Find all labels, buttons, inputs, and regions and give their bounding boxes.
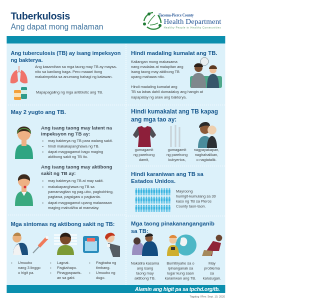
text: cases: County taon-taon. (176, 204, 206, 208)
text: latent: Ang isang taong may latent na (41, 126, 112, 132)
heading: stages: May 2 yugto ang TB. (11, 110, 66, 116)
text: active: pagtawa, pagsigaw o pagkanta. (48, 195, 101, 199)
heading: at risk: Mga taong pinakananganganib (131, 222, 215, 228)
icon: grid of people (135, 188, 171, 212)
panel: not common in US (131, 172, 216, 212)
icon: scale (83, 236, 99, 253)
heading: symptoms: Mga sintomas ng aktibong sakit ng TB: (11, 222, 115, 228)
captions: travel: Bumibiyahe sa o (167, 262, 194, 266)
captions: utensils: kubyertos, (168, 158, 186, 162)
logo: health department: Healthy People in Healthy Communities (164, 26, 221, 30)
captions: couple: naghahalikan, (195, 153, 218, 157)
text: symptom list 2 (50, 261, 82, 280)
icon: medicine (14, 87, 27, 100)
text: symptom list 3: Umuubo ng (96, 271, 115, 275)
text: active: may bakterya ng TB at may sakit. (48, 179, 104, 183)
text: outdoors: TB sa labas dahil dumadaloy ang hangin at (131, 90, 204, 94)
text: symptom list 3: Pagbaba ng (96, 261, 116, 265)
text: lungs: nito sa kanilang baga. Pero maaari itong (35, 70, 102, 74)
heading: does not spread: Hindi kumakalat ang TB kapag (131, 110, 218, 116)
text: lungs: makaimpekta sa anumang bahagi ng katawan. (35, 75, 113, 79)
heading: what is TB: Ang tuberculosis (TB) ay isang impeksyon (11, 51, 121, 57)
text: symptom list 1: nang 3 linggo (18, 266, 41, 270)
text: cases: Mayroong (176, 190, 193, 194)
icon: person active (15, 174, 33, 206)
text: latent: may bakterya ng TB para walang sakit. (48, 139, 113, 143)
icon: person with health problem (202, 235, 222, 256)
icon: two people talking (190, 58, 222, 88)
heading: what is TB: ng bakterya. (11, 58, 43, 64)
text: symptom list 2: Lagnat. (57, 261, 70, 265)
text: symptom list 1 (11, 261, 41, 275)
bottom teal bar (7, 285, 225, 293)
icon: utensils (171, 125, 180, 147)
text: close contact: nang madalas at malapitan ang (131, 65, 183, 69)
panel: 2 stages (11, 110, 113, 210)
icon: shirt (133, 126, 156, 147)
text: antibiotics: Mapapagaling ng mga antibiotic ang TB. (36, 90, 103, 94)
captions: utensils: ng parehong (166, 153, 188, 157)
text: latent: hindi makakapanghawa ng TB. (48, 144, 99, 148)
captions: health: sa (210, 272, 215, 276)
text: symptom list 3: dugo. (96, 276, 105, 280)
subtitle: Ang dapat mong malaman (11, 22, 103, 32)
captions: shirt: ng parehong (133, 153, 155, 157)
text: outdoors: Hindi madaling kumalat ang (131, 85, 177, 89)
captions: travel: ipinanganak sa (168, 266, 194, 270)
call to action: Alamin ang higit pa sa tpchd.org/tb. (134, 287, 220, 293)
heading: not easily spread: Hindi madaling kumalat ang TB. (131, 51, 218, 57)
heading: US: Estados Unidos. (131, 179, 176, 185)
icon: person latent (15, 126, 33, 159)
captions: health: problema (204, 266, 221, 270)
text: active: pamamagitan ng pag-ubo, pagbobhing, (48, 190, 113, 194)
text: symptom list 1: o higit pa. (18, 271, 34, 275)
text: symptom list 2: an sa gabi. (57, 276, 75, 280)
panel: not easily spread (131, 51, 222, 100)
text: cases: humigit-kumulang sa 30 (176, 194, 216, 198)
text: lungs: Ang kasamihan sa mga taong may TB ay maysa- (35, 65, 118, 69)
icon: thermometer (33, 236, 48, 253)
text: active: sakit ng TB ay: (41, 171, 76, 177)
captions: health: May (208, 262, 216, 266)
text: latent: dapat magpagamot bago maging (48, 150, 103, 154)
captions: couple: o nagtatalik. (196, 158, 217, 162)
text: active: makakapanghawa ng TB sa (48, 185, 95, 189)
icon: traveler and globe (167, 234, 196, 256)
text: symptom list 1: Umuubo (18, 261, 32, 265)
logo: health department: Tacoma-Pierce County (159, 13, 194, 17)
text: symptom list 3: timbang. (96, 266, 110, 270)
text: close contact: Kailangan mong makasama (131, 60, 178, 64)
icon: lungs (10, 66, 28, 83)
captions: shirt: gumagamit (135, 148, 154, 152)
heading: US: Hindi karaniwan ang TB sa (131, 172, 204, 178)
heading: at risk: sa TB: (131, 229, 148, 235)
text: active (41, 164, 113, 210)
panel: does not spread when (131, 110, 219, 162)
captions: household: ang isang (137, 266, 153, 270)
text: close contact: upang mahawa nito. (131, 75, 165, 79)
text: active: Ang isang taong may aktibong (41, 164, 112, 170)
revision note: Tagalog I Rev. Sept. 10, 2020 (190, 294, 225, 298)
text: symptom list 3 (89, 261, 116, 280)
panel: most at risk (131, 222, 222, 280)
text: outdoors: napapatay ng araw ang bakterya. (131, 96, 187, 100)
text: latent (41, 126, 113, 159)
icon: family (132, 233, 158, 256)
icon: couple kissing (198, 122, 217, 148)
text: latent: impeksyon ng TB ay: (41, 132, 91, 138)
captions: household: Nakatira kasama (131, 262, 160, 266)
panel: what is TB (10, 51, 121, 100)
captions: travel: lugar kung saan (167, 272, 194, 276)
icon: person coughing blood (105, 233, 120, 257)
logo: health department: Health Department (164, 17, 222, 26)
heading: does not spread: ang mga tao ay: (131, 118, 177, 124)
captions: household: taong may (136, 272, 154, 276)
text: symptom list 2: Pinagpapawis- (57, 271, 82, 275)
title: Tuberkulosis (11, 12, 71, 22)
logo: health department (143, 12, 222, 30)
captions: household: aktibong TB. (134, 276, 156, 280)
dividers (8, 44, 225, 285)
text: active: dapat magpagamot upang malawasan (48, 201, 112, 205)
captions: health: kalusugan. (203, 276, 221, 280)
text: cases: kaso ng TB sa Pierce (176, 200, 212, 204)
icon: coughing person (12, 233, 28, 255)
icon: sweating man (54, 233, 77, 255)
text: latent: aktibong sakit ng TB ito. (48, 155, 88, 159)
text: active: maging mabuti/ba at mamatay. (48, 206, 99, 210)
captions: utensils: gumagamit (168, 148, 187, 152)
captions: shirt: damit, (139, 158, 149, 162)
text: symptom list 2: Pagkahapo. (57, 266, 77, 270)
panel: symptoms (11, 222, 120, 280)
captions: couple: nagyayakapan, (194, 148, 219, 152)
text: close contact: isang taong may aktibong TB (131, 70, 180, 74)
top teal bar (7, 36, 225, 44)
captions: travel: karaniwan ang TB. (165, 276, 196, 280)
panel: main background (7, 36, 225, 293)
